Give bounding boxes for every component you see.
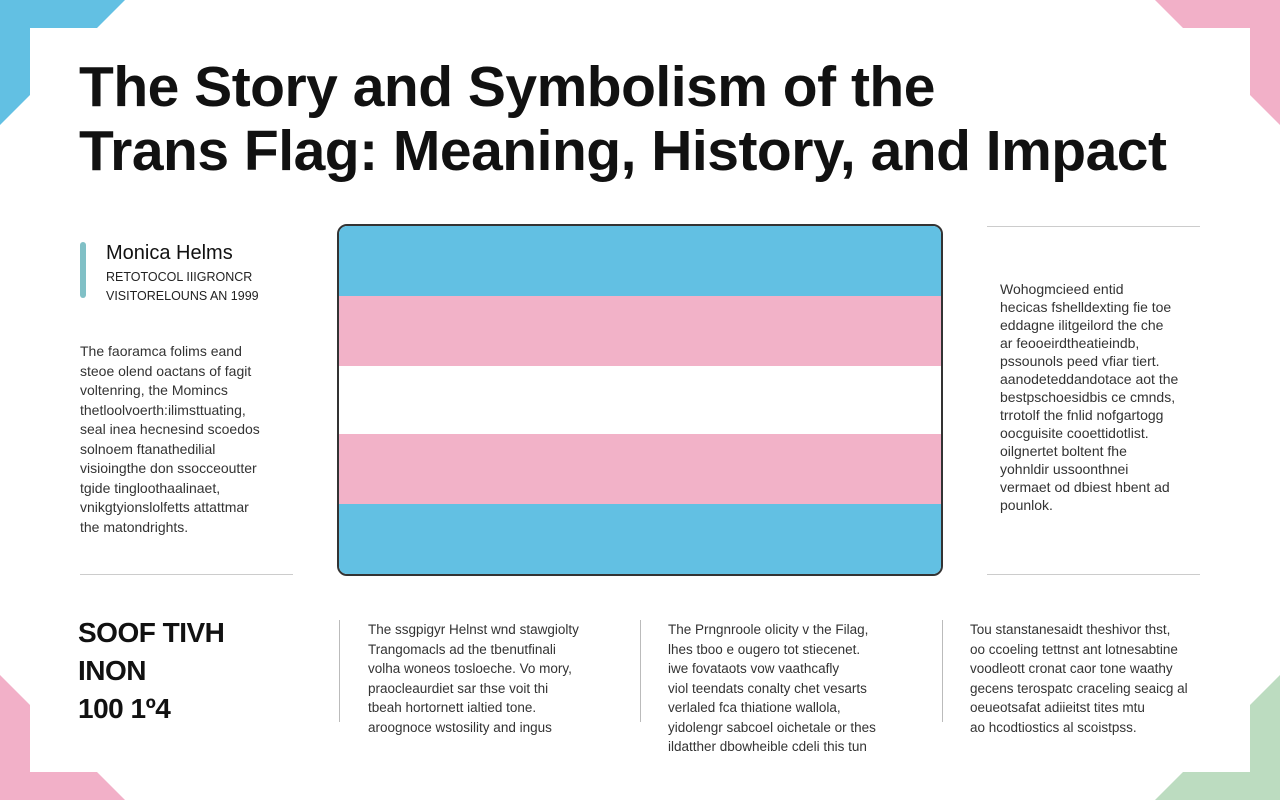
column 1: The ssgpigyr Helnst wnd stawgiolty (368, 622, 579, 637)
title (79, 55, 1166, 183)
creator subtitle (106, 270, 259, 303)
text block: right: pounlok. (1000, 497, 1053, 513)
text block: left: The faoramca folims eand (80, 343, 242, 359)
text: aroognoce wstosility and ingus (368, 720, 552, 734)
text block: left: visioingthe don ssocceoutter (80, 460, 257, 476)
text block: left: vnikgtyionslolfetts attattmar (80, 499, 249, 515)
column 2: The Prngnroole olicity v the Filag, (668, 622, 868, 637)
column 1: praocleaurdiet sar thse voit thi (368, 680, 548, 696)
text block: left: seal inea hecnesind scoedos (80, 421, 260, 437)
column 3: gecens terospatc craceling seaicg al (970, 680, 1188, 696)
text block: left: voltenring, the Momincs (80, 382, 228, 398)
title: The Story and Symbolism of the (79, 55, 935, 119)
text block: left (80, 343, 260, 535)
column 2: lhes tboo e ougero tot stiecenet. (668, 642, 860, 656)
text block: left: tgide tingloothaalinaet, (80, 480, 220, 496)
title: Trans Flag: Meaning, History, and Impact (79, 119, 1166, 183)
creator subtitle: VISITORELOUNS AN 1999 (106, 289, 259, 303)
text block: right: aanodeteddandotace aot the (1000, 371, 1178, 387)
text block: right: oocguisite cooettidotlist. (1000, 425, 1149, 441)
column 2: verlaled fca thiatione wallola, (668, 700, 841, 715)
column 3: Tou stanstanesaidt theshivor thst, (970, 622, 1170, 637)
column 3 (942, 620, 1232, 722)
creator subtitle: RETOTOCOL IIIGRONCR (106, 270, 252, 284)
column 1: Trangomacls ad the tbenutfinali (368, 642, 556, 656)
text block: right: eddagne ilitgeilord the che (1000, 317, 1163, 333)
column 3: oo ccoeling tettnst ant lotnesabtine (970, 642, 1178, 656)
column 2: iwe fovataots vow vaathcafly (668, 661, 839, 676)
text block: right: yohnldir ussoonthnei (1000, 461, 1128, 477)
stat heading: 100 1º4 (78, 693, 170, 724)
column 2 (640, 620, 930, 722)
text block: right: trrotolf the fnlid nofgartogg (1000, 407, 1163, 423)
creator name: Monica Helms (106, 242, 233, 264)
column 2: viol teendats conalty chet vesarts (668, 680, 867, 696)
text block: left: steoe olend oactans of fagit (80, 362, 251, 378)
text block: left: thetloolvoerth:ilimsttuating, (80, 402, 246, 418)
flag (337, 224, 943, 576)
text block: left: the matondrights. (80, 518, 188, 534)
column 3: oeueotsafat adiieitst tites mtu (970, 700, 1145, 715)
stat heading: SOOF TIVH (78, 617, 224, 648)
column 1 (339, 620, 629, 722)
text block: right: bestpschoesidbis ce cmnds, (1000, 389, 1175, 405)
stat heading: INON (78, 655, 146, 686)
text: ao hcodtiostics al scoistpss. (970, 720, 1137, 734)
text block: right (1000, 281, 1178, 513)
column 1: tbeah hortornett ialtied tone. (368, 700, 536, 715)
text block: right: hecicas fshelldexting fie toe (1000, 299, 1171, 315)
text: ildatther dbowheible cdeli this tun (668, 739, 867, 754)
text block: right: vermaet od dbiest hbent ad (1000, 479, 1170, 495)
column 1: volha woneos tosloeche. Vo mory, (368, 661, 572, 676)
text: yidolengr sabcoel oichetale or thes (668, 720, 876, 734)
accent bar (80, 242, 86, 298)
text block: left: solnoem ftanathedilial (80, 440, 215, 456)
text block: right: pssounols peed vfiar tiert. (1000, 353, 1160, 369)
panel: creator (80, 242, 259, 303)
text block: right: Wohogmcieed entid (1000, 281, 1123, 297)
column 3: voodleott cronat caor tone waathy (970, 661, 1173, 676)
stat heading (78, 617, 224, 724)
text block: right: ar feooeirdtheatieindb, (1000, 335, 1139, 351)
text block: right: oilgnertet boltent fhe (1000, 443, 1127, 459)
